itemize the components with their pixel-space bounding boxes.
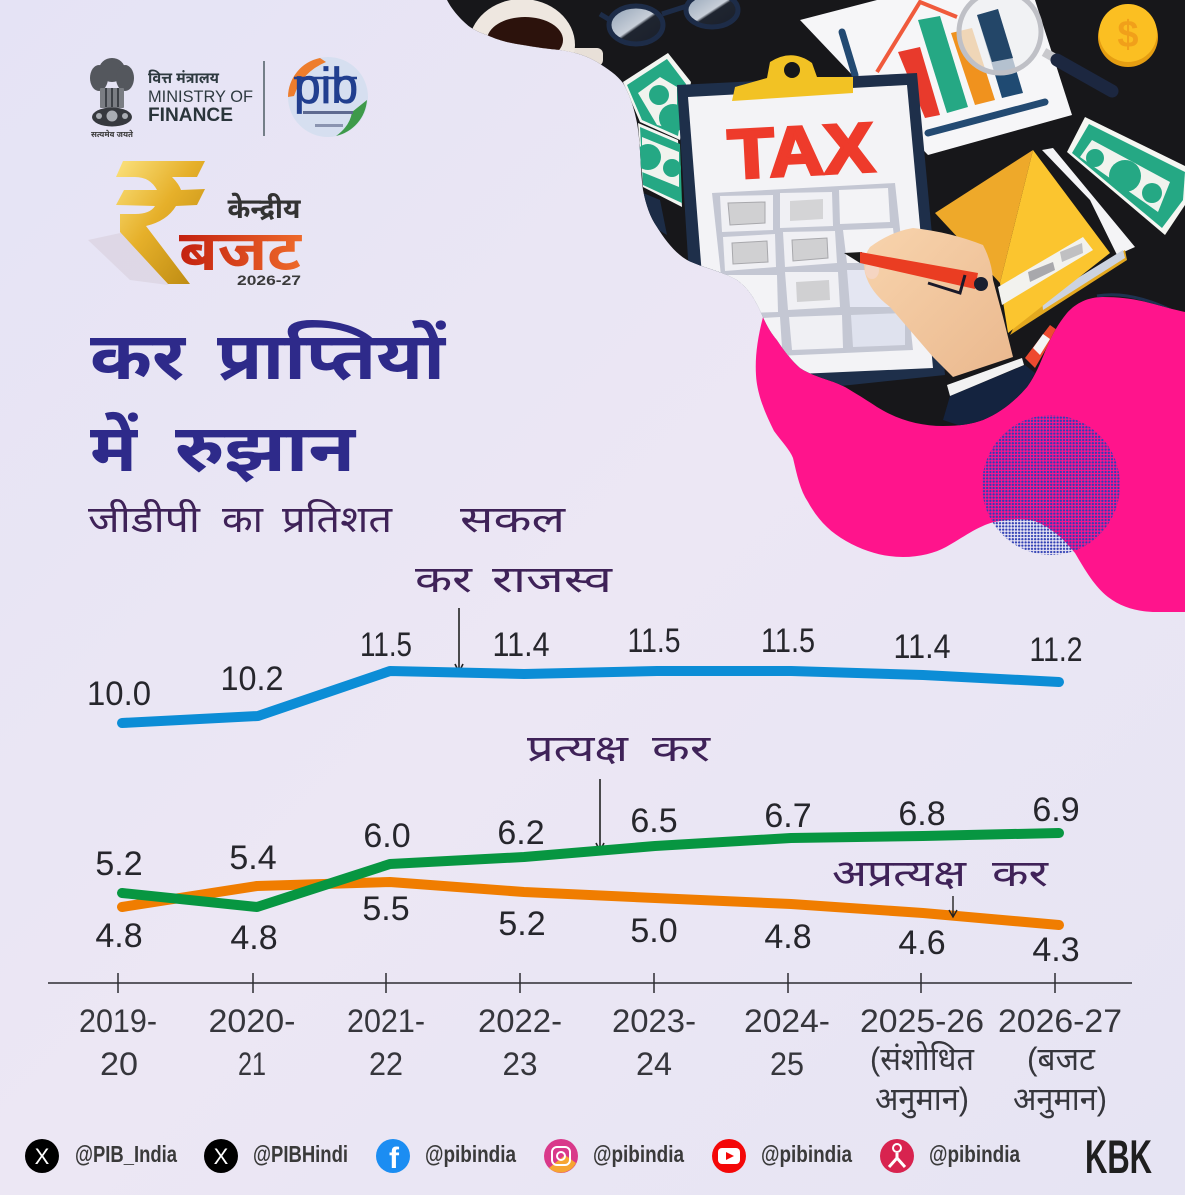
social: facebook: f (389, 1142, 400, 1175)
form grid (700, 183, 913, 358)
gross tax values: 11.4 (894, 628, 950, 666)
gross tax values (87, 622, 1082, 713)
pen (844, 252, 988, 293)
chart paper (800, 0, 1072, 155)
navy arc (1097, 295, 1175, 312)
hand (864, 228, 1013, 377)
title: प्राप्तियों (217, 319, 447, 393)
subtitle: जीडीपी (88, 499, 202, 540)
series label: direct tax: कर (652, 728, 711, 769)
line: gross tax revenue (122, 671, 1059, 723)
series label: direct tax (527, 728, 711, 769)
pink blob (756, 290, 1185, 612)
arrow to indirect tax line (949, 896, 957, 917)
coffee cup (472, 0, 603, 64)
x axis labels: 2025-26 (860, 1003, 984, 1039)
rupee shadow (88, 232, 168, 285)
x axis (48, 973, 1132, 993)
green banknote left upper (623, 53, 691, 140)
social: youtube (712, 1139, 852, 1173)
logo: national emblem: सत्यमेव जयते (91, 130, 134, 139)
x axis labels: 24 (636, 1046, 672, 1082)
gross tax values: 11.5 (628, 622, 680, 660)
social: facebook (376, 1139, 516, 1175)
indirect tax values: 4.8 (230, 919, 278, 957)
social: X PIBHindi: @PIBHindi (253, 1141, 348, 1167)
indirect tax values: 4.6 (898, 924, 946, 962)
coin (1098, 4, 1158, 67)
series label: gross tax revenue: सकल (460, 499, 566, 540)
direct tax values: 5.2 (95, 845, 143, 883)
gross tax values: 11.5 (360, 626, 412, 664)
x axis labels: 2020- (208, 1003, 296, 1039)
subtitle: का (222, 499, 265, 540)
indirect tax values: 4.8 (764, 918, 812, 956)
indirect tax values: 4.8 (95, 917, 143, 955)
subtitle: प्रतिशत (282, 499, 393, 540)
social: instagram: @pibindia (593, 1141, 684, 1167)
coin: $ (1117, 14, 1139, 56)
social: youtube: @pibindia (761, 1141, 852, 1167)
x axis labels: 2021- (347, 1003, 425, 1039)
direct tax values: 6.5 (630, 802, 678, 840)
social: X PIB_India: X (35, 1144, 50, 1169)
gross tax values: 10.2 (220, 660, 284, 698)
series label: indirect tax: कर (992, 853, 1049, 894)
arrow to direct tax line (596, 779, 604, 851)
social: facebook: @pibindia (425, 1141, 516, 1167)
line: direct tax (122, 833, 1059, 907)
glasses (600, 0, 738, 44)
ministry label: वित्त मंत्रालय (148, 70, 219, 87)
x axis labels: 25 (770, 1046, 804, 1082)
title: में (90, 411, 138, 485)
indirect tax values: 4.3 (1032, 931, 1080, 969)
sleeve (943, 358, 1035, 428)
social: X PIBHindi (204, 1139, 348, 1173)
social: instagram (544, 1139, 684, 1173)
title: कर (90, 319, 187, 393)
arrow to gross tax line (455, 608, 463, 672)
halftone circle (982, 415, 1120, 555)
clipboard clip (732, 55, 853, 101)
x axis labels: 21 (238, 1046, 266, 1082)
indirect tax values: 5.2 (498, 905, 546, 943)
ministry label: MINISTRY OF (148, 87, 253, 106)
designer mark: KBK (1085, 1130, 1152, 1183)
series label: gross tax revenue: कर (415, 559, 473, 600)
logo divider (263, 61, 265, 136)
x axis labels: 2022- (478, 1003, 562, 1039)
marker (1025, 325, 1057, 368)
line: indirect tax (122, 882, 1059, 925)
budget logo: text: बजट (179, 219, 302, 282)
x axis labels: 2019- (79, 1003, 157, 1039)
gross tax values: 10.0 (87, 675, 151, 713)
social: koo: @pibindia (929, 1141, 1020, 1167)
direct tax values: 5.4 (229, 839, 277, 877)
clipboard paper (688, 85, 933, 378)
direct tax values: 6.9 (1032, 791, 1080, 829)
x axis labels: 2026-27 (998, 1003, 1122, 1039)
gross tax values: 11.5 (761, 622, 815, 660)
x axis labels: (संशोधित (870, 1041, 975, 1077)
budget logo: rupee symbol (116, 161, 205, 284)
budget logo: text: 2026-27 (237, 272, 301, 288)
x axis labels: 20 (100, 1046, 138, 1082)
logo: national emblem (90, 58, 134, 139)
x axis labels: 22 (369, 1046, 403, 1082)
budget logo: text: केन्द्रीय (228, 191, 302, 224)
direct tax values: 6.7 (764, 797, 812, 835)
x axis labels: 2023- (612, 1003, 696, 1039)
direct tax values: 6.2 (497, 814, 545, 852)
green banknote right (1067, 117, 1185, 235)
title (90, 319, 447, 485)
indirect tax values (95, 890, 1080, 969)
series label: gross tax revenue (415, 499, 614, 600)
ministry label (148, 70, 253, 126)
green banknote left lower (635, 123, 682, 235)
direct tax values (95, 791, 1080, 883)
x axis labels (79, 1003, 1122, 1119)
thumb nail (865, 264, 879, 279)
direct tax values: 6.8 (898, 795, 946, 833)
social: X PIBHindi: X (214, 1144, 229, 1169)
budget logo: text (179, 191, 302, 288)
social: X PIB_India: @PIB_India (75, 1141, 177, 1167)
yellow folder (935, 148, 1135, 335)
clipboard (677, 73, 945, 390)
TAX heading on clipboard: TAX (726, 108, 876, 194)
clip hole (784, 62, 800, 78)
magnifier (959, 0, 1112, 91)
direct tax values: 6.0 (363, 817, 411, 855)
social: koo (880, 1139, 1020, 1173)
social: X PIB_India (25, 1139, 177, 1173)
series label: direct tax: प्रत्यक्ष (527, 728, 630, 769)
PIB logo (288, 57, 368, 137)
x axis labels: 2024- (744, 1003, 830, 1039)
title: रुझान (175, 411, 357, 485)
x axis labels: अनुमान) (875, 1081, 969, 1119)
x axis labels: अनुमान) (1013, 1081, 1107, 1119)
x axis labels: 23 (502, 1046, 538, 1082)
series label: gross tax revenue: राजस्व (492, 559, 614, 600)
photo: tax desk illustration (440, 0, 1185, 430)
subtitle (88, 499, 393, 540)
x axis labels: (बजट (1027, 1041, 1096, 1077)
ministry label: FINANCE (148, 105, 233, 126)
PIB logo: pib (294, 58, 358, 114)
indirect tax values: 5.0 (630, 912, 678, 950)
series label: indirect tax (832, 853, 1049, 894)
gross tax values: 11.2 (1030, 631, 1082, 669)
indirect tax values: 5.5 (362, 890, 410, 928)
gross tax values: 11.4 (492, 626, 550, 664)
series label: indirect tax: अप्रत्यक्ष (832, 853, 968, 894)
